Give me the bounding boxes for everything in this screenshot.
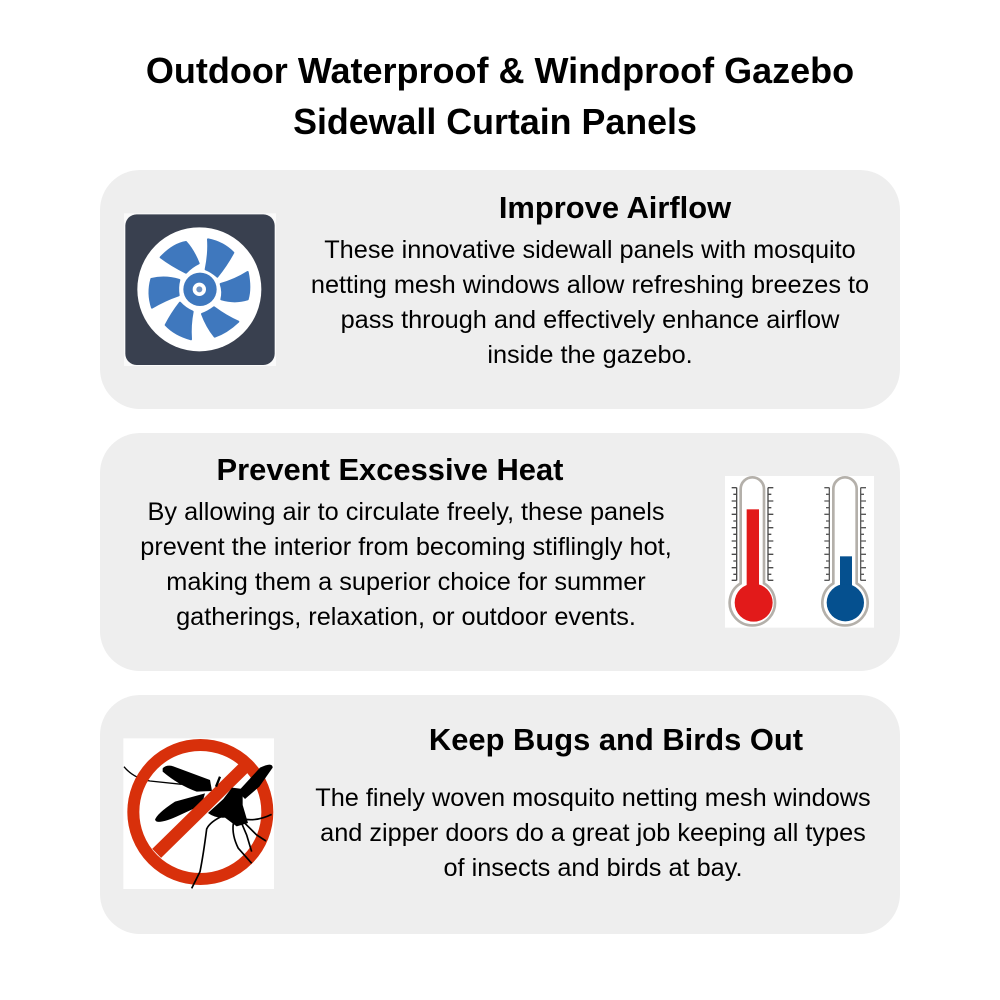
heading: Improve Airflow: [499, 190, 731, 225]
text block: The finely woven mosquito netting mesh windows: [315, 784, 871, 812]
text block: prevent the interior from becoming stiflingly hot,: [140, 533, 672, 561]
text block: pass through and effectively enhance airflow: [341, 306, 839, 334]
heading: Keep Bugs and Birds Out: [429, 722, 803, 757]
text block: These innovative sidewall panels with mosquito: [324, 236, 856, 264]
text block: of insects and birds at bay.: [443, 854, 743, 882]
title: Sidewall Curtain Panels: [293, 102, 697, 142]
text block: [315, 784, 871, 882]
panel: prevent excessive heat: [100, 433, 900, 671]
title: Outdoor Waterproof & Windproof Gazebo: [146, 50, 854, 91]
title: [146, 50, 854, 142]
icon: thermometers: [725, 476, 874, 628]
panel: improve airflow: [100, 170, 900, 409]
text block: By allowing air to circulate freely, these panels: [148, 498, 664, 526]
icon: no mosquito: [124, 738, 274, 889]
text block: [311, 236, 869, 369]
text block: and zipper doors do a great job keeping all types: [320, 819, 866, 847]
icon: fan: [124, 214, 276, 366]
text block: gatherings, relaxation, or outdoor events.: [176, 603, 636, 631]
text block: inside the gazebo.: [487, 341, 693, 369]
text block: netting mesh windows allow refreshing breezes to: [311, 271, 869, 299]
heading: Prevent Excessive Heat: [217, 452, 563, 487]
text block: making them a superior choice for summer: [166, 568, 646, 596]
panel: keep bugs and birds out: [100, 695, 900, 934]
text block: [140, 498, 672, 631]
